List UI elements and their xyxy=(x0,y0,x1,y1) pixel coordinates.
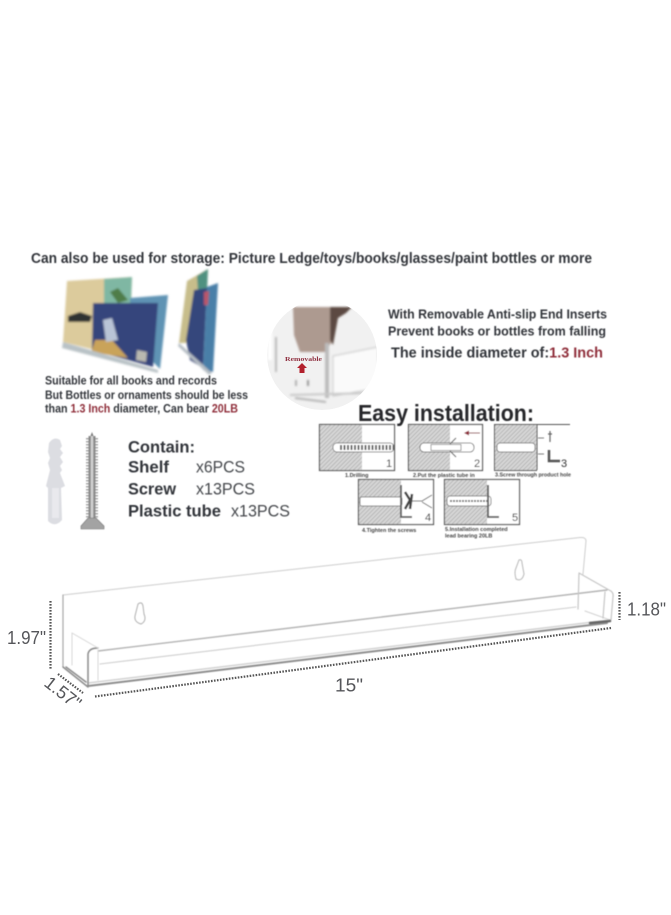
diagram: step 2 plastic tube xyxy=(408,424,482,479)
diagram: step 4 tighten the screws: 4.Tighten the screws xyxy=(362,528,416,534)
diagram: step 5 installation completed: lead bearing 20LB xyxy=(445,534,492,540)
text: anti-slip end inserts: Prevent books or bottles from falling xyxy=(388,324,606,338)
dimension: 1.57 inch depth: 1.57" xyxy=(41,672,85,713)
diagram: step 5 installation completed: 5 xyxy=(512,512,518,524)
text: package contents: x6PCS xyxy=(196,458,245,476)
dimension: 1.18 inch lip height xyxy=(620,592,666,620)
photo: removable end insert circle: Removable xyxy=(285,356,322,363)
text: package contents: x13PCS xyxy=(231,502,290,520)
diagram: step 4 tighten the screws xyxy=(358,480,434,534)
diagram: step 5 installation completed xyxy=(444,480,520,540)
diagram: step 2 plastic tube: 2.Put the plastic tube in xyxy=(413,473,475,479)
text: inside diameter: The inside diameter of:1.3 Inch xyxy=(391,344,603,362)
photo: books on shelf side view xyxy=(178,269,218,375)
photo: books on shelf front view xyxy=(62,277,168,373)
diagram: step 2 plastic tube: 2 xyxy=(474,458,480,470)
product drawing: acrylic shelf xyxy=(63,537,613,687)
text: book suitability note: But Bottles or ornaments should be less xyxy=(45,390,248,402)
diagram: step 3 screw through product hole: 3 xyxy=(561,458,567,470)
heading: storage uses: Can also be used for storage: Picture Ledge/toys/books/glasses/paint bottles or more xyxy=(31,251,592,267)
dimension: 15 inch length: 15" xyxy=(335,676,363,696)
text: book suitability note: Suitable for all books and records xyxy=(45,376,217,388)
text: anti-slip end inserts xyxy=(388,306,607,338)
dimension: 1.18 inch lip height: 1.18" xyxy=(627,600,666,620)
photo: removable end insert circle xyxy=(267,300,378,410)
icon: screw xyxy=(81,432,104,529)
dimension: 15 inch length xyxy=(95,628,611,696)
heading: easy installation: Easy installation: xyxy=(358,400,534,426)
text: package contents: Plastic tube xyxy=(128,502,221,520)
text: book suitability note: than 1.3 Inch diameter, Can bear 20LB xyxy=(45,404,238,416)
diagram: step 1 drilling: 1.Drilling xyxy=(345,473,369,479)
diagram: step 4 tighten the screws: 4 xyxy=(425,512,431,524)
diagram: step 3 screw through product hole xyxy=(494,424,571,478)
diagram: step 1 drilling: 1 xyxy=(386,458,392,470)
diagram: step 1 drilling xyxy=(320,424,394,479)
text: book suitability note xyxy=(45,376,248,416)
dimension: 1.97 inch height xyxy=(7,601,50,670)
text: anti-slip end inserts: With Removable Anti-slip End Inserts xyxy=(388,306,607,322)
diagram: step 5 installation completed: 5.Installation completed xyxy=(445,527,508,533)
diagram: step 3 screw through product hole: 3.Screw through product hole xyxy=(495,472,571,478)
text: package contents: x13PCS xyxy=(196,480,255,498)
text: package contents xyxy=(128,438,290,520)
text: package contents: Contain: xyxy=(128,438,195,456)
dimension: 1.97 inch height: 1.97" xyxy=(7,628,46,648)
text: package contents: Shelf xyxy=(128,458,170,476)
icon: plastic wall anchor xyxy=(46,439,65,524)
text: package contents: Screw xyxy=(128,480,176,498)
